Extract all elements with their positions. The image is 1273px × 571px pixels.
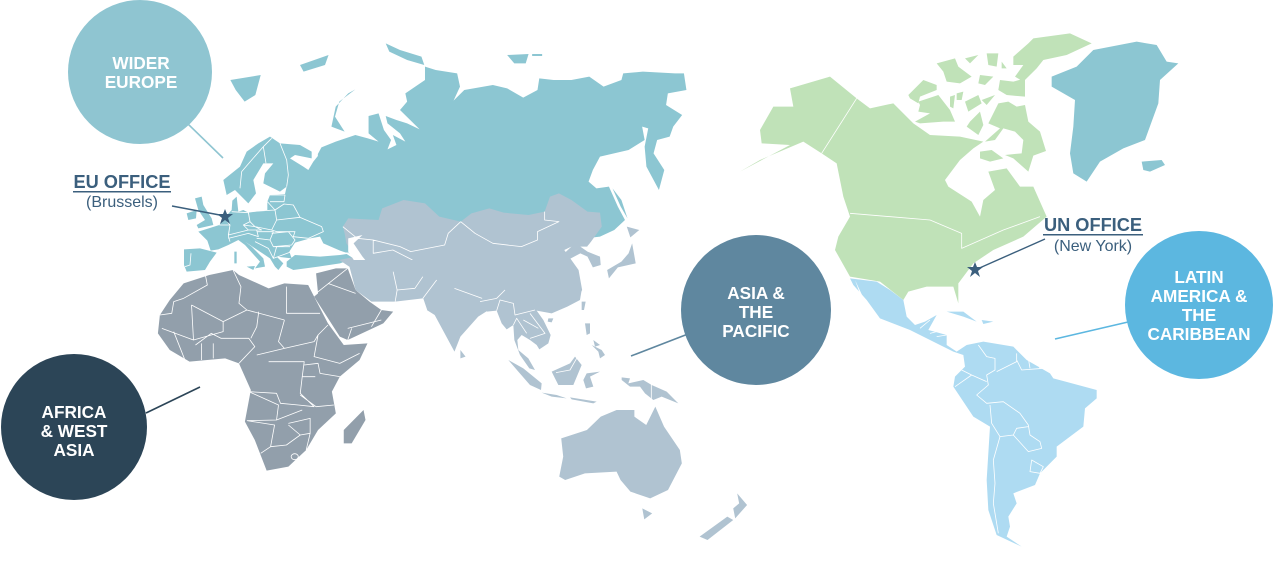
icon: EU office star xyxy=(217,209,233,224)
connector: EU office xyxy=(172,206,225,216)
connector: Wider Europe xyxy=(188,124,223,158)
connector: Asia and the Pacific xyxy=(631,334,688,356)
Africa borders xyxy=(160,268,381,453)
callout: Africa and West Asia: AFRICA xyxy=(42,402,106,422)
map: Asia and the Pacific region south xyxy=(348,260,747,540)
icon: UN office star xyxy=(967,262,983,277)
map: North America region xyxy=(740,77,1047,303)
Arctic islands xyxy=(230,43,627,218)
callout: Latin America and the Caribbean: AMERICA & xyxy=(1151,286,1247,306)
Tasmania, New Zealand, Sri Lanka xyxy=(460,350,747,540)
map: Southeast Asia and Melanesia xyxy=(480,290,678,403)
map: Asia and the Pacific region north xyxy=(339,193,639,317)
callout: Wider Europe: WIDER xyxy=(112,53,170,73)
callout: Asia and the Pacific xyxy=(681,235,831,385)
Australia xyxy=(559,407,682,498)
connector: Latin America and the Caribbean xyxy=(1055,322,1128,339)
map: Greenland and Iceland xyxy=(1052,42,1178,182)
map: Canadian Arctic islands xyxy=(908,33,1092,172)
label: EU office: EU OFFICE xyxy=(73,172,171,192)
callout: Africa and West Asia: ASIA xyxy=(53,440,95,460)
map: Africa and West Asia region xyxy=(158,268,393,471)
UK, Ireland and Mediterranean islands xyxy=(187,197,255,270)
callout: Latin America and the Caribbean: CARIBBEAN xyxy=(1147,324,1251,344)
Caribbean islands xyxy=(947,312,993,324)
South Asia borders xyxy=(393,272,482,310)
Europe borders xyxy=(185,138,355,267)
label: EU office: (Brussels) xyxy=(86,194,158,211)
callout: Asia and the Pacific: PACIFIC xyxy=(722,321,790,341)
callout: Africa and West Asia: & WEST xyxy=(41,421,108,441)
callout: Wider Europe: EUROPE xyxy=(105,72,177,92)
connector: Africa and West Asia xyxy=(146,387,200,413)
Arabia xyxy=(314,268,393,340)
label: UN office: (New York) xyxy=(1054,238,1132,255)
label: UN office: UN OFFICE xyxy=(1044,215,1142,235)
Iberia xyxy=(184,248,217,272)
callout: Latin America and the Caribbean xyxy=(1125,231,1273,379)
Japan xyxy=(607,227,639,278)
map: Europe, part of wider Europe region xyxy=(184,137,355,272)
label: EU office xyxy=(73,172,171,211)
map: Latin America and the Caribbean region xyxy=(850,278,1097,547)
Maritime Southeast Asia islands xyxy=(508,302,678,403)
callout: Latin America and the Caribbean: LATIN xyxy=(1174,267,1224,287)
callout: Africa and West Asia xyxy=(1,354,147,500)
Madagascar xyxy=(344,410,365,443)
North America borders xyxy=(822,98,1040,248)
callout: Asia and the Pacific: THE xyxy=(739,302,773,322)
label: UN office xyxy=(1043,215,1143,255)
callout: Wider Europe xyxy=(68,0,212,144)
connector: UN office xyxy=(975,239,1045,270)
Asia borders xyxy=(343,212,595,317)
callout: Asia and the Pacific: ASIA & xyxy=(727,283,785,303)
South America borders xyxy=(920,320,1043,533)
Turkey xyxy=(287,254,353,270)
callout: Latin America and the Caribbean: THE xyxy=(1182,305,1216,325)
map: Russia, part of wider Europe region xyxy=(230,43,686,247)
Southeast Asia borders xyxy=(480,290,651,399)
